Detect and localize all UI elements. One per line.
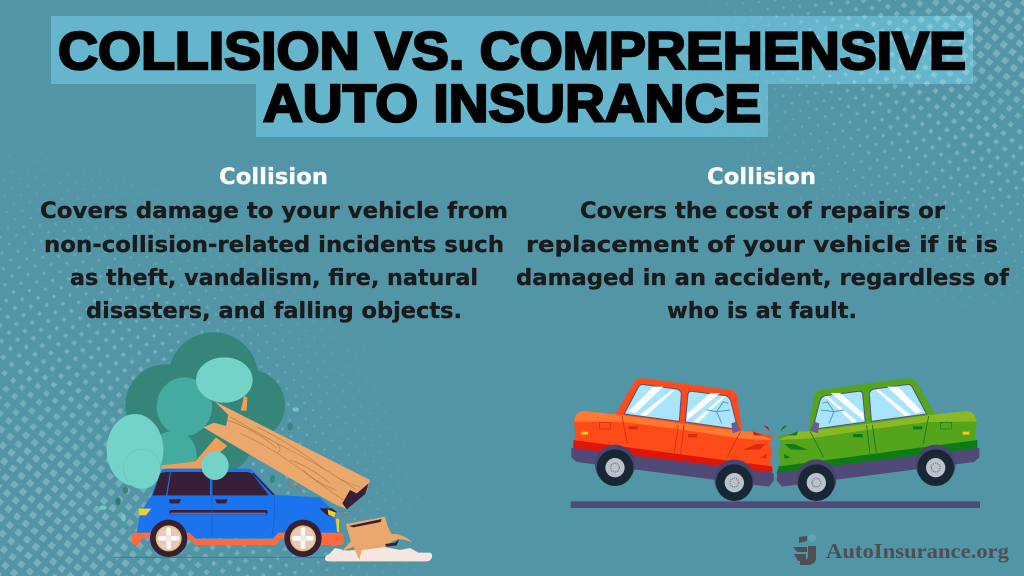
- green car: [772, 378, 979, 501]
- illustration: tree fallen on blue car: [99, 332, 432, 561]
- blue car: [132, 469, 343, 557]
- foliage highlights: [107, 357, 253, 489]
- text block: left column: non-collision-related incidents such: [44, 233, 504, 258]
- logo: AutoInsurance.org: [826, 539, 1010, 563]
- text block: left column: disasters, and falling objects.: [86, 299, 462, 324]
- text block: left column: Collision: [219, 165, 328, 190]
- logo icon: [793, 534, 816, 565]
- text block: right column: replacement of your vehicle if it is: [526, 233, 998, 258]
- text block: right column: Collision: [707, 165, 816, 190]
- logo: [793, 534, 1010, 565]
- text block: right column: Covers the cost of repairs or: [580, 199, 945, 224]
- debris: snow, stump and leaves: [99, 407, 432, 561]
- title: [51, 0, 1024, 320]
- bumper: [132, 533, 343, 545]
- illustration: two cars in head-on crash: [571, 378, 980, 508]
- text block: right column: who is at fault.: [667, 299, 857, 324]
- text block: left column: [40, 165, 508, 324]
- title: COLLISION VS. COMPREHENSIVE: [58, 22, 966, 81]
- background: [0, 144, 432, 576]
- title: AUTO INSURANCE: [263, 74, 761, 134]
- red car: [571, 378, 778, 501]
- text block: left column: Covers damage to your vehicle from: [40, 199, 508, 224]
- text block: right column: [516, 165, 1009, 324]
- road: [571, 501, 980, 508]
- tree canopy: [125, 332, 285, 479]
- text block: left column: as theft, vandalism, fire, natural: [70, 266, 478, 291]
- text block: right column: damaged in an accident, regardless of: [516, 266, 1009, 291]
- fallen trunk: [203, 402, 370, 509]
